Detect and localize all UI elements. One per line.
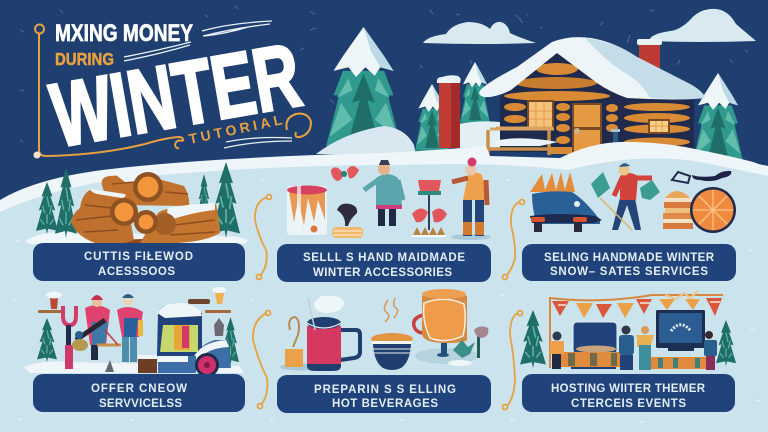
- left screen: [573, 322, 617, 354]
- right screen: [656, 310, 705, 351]
- white swooshes: [124, 21, 292, 148]
- tutorial label: TUTORIAL: [187, 111, 284, 147]
- connector: accessories to snow services: [502, 200, 524, 280]
- leaves: [591, 172, 660, 200]
- chimney: tall red: [437, 75, 461, 148]
- card: firewood: CUTTIS FIŁEWOD: [84, 251, 193, 263]
- card: handmade accessories: WINTER ACCESSORIES: [313, 267, 452, 279]
- trees: [36, 162, 240, 238]
- chimney: roof: [637, 39, 662, 76]
- tree: behind cabin: [460, 62, 490, 123]
- burger stack: [663, 191, 694, 229]
- card: winter events: [522, 374, 735, 412]
- person: red sweater: [600, 163, 652, 230]
- panel: hot beverages: [280, 289, 488, 371]
- stove pipe: [611, 129, 620, 149]
- card: handmade accessories: SELLL S HAND MAIDMADE: [303, 252, 465, 264]
- card: firewood: ACESSSOOS: [98, 266, 175, 278]
- tree: large left: [326, 27, 401, 147]
- tree: left of chimney: [415, 84, 449, 151]
- snowfield ground: [0, 142, 768, 432]
- left table: [560, 352, 623, 369]
- orange glass: [414, 289, 479, 364]
- during heading: DURING: [55, 49, 114, 69]
- card: snow services: SELING HANDMADE WINTER: [544, 252, 715, 264]
- snow base: [25, 232, 248, 244]
- tray with box and loop: [280, 317, 320, 370]
- bowl: [371, 333, 413, 370]
- visitors: [550, 326, 717, 370]
- cabin window: [527, 100, 554, 129]
- card: snow services: [522, 244, 736, 281]
- title frame line: [35, 24, 183, 156]
- panel: snow services people: [24, 287, 244, 377]
- cabin walls: [500, 52, 694, 152]
- cloud: right: [649, 9, 756, 42]
- right table: [651, 357, 706, 369]
- making money heading: MXING MONEY: [55, 20, 193, 47]
- card: snow services people: SERVVICELSS: [99, 398, 182, 410]
- small window: [648, 119, 670, 134]
- snow speckles in the sky: [20, 5, 748, 142]
- connector: offer to beverages: [253, 310, 270, 408]
- person: pink hat: [72, 295, 121, 372]
- winter heading: WINTER: [44, 26, 308, 167]
- panel: winter events: [520, 291, 736, 370]
- snowy roof: [479, 37, 705, 100]
- cabin logs: [504, 63, 690, 154]
- jar: [287, 185, 327, 235]
- card: hot beverages: PREPARIN S S ELLING: [314, 384, 456, 396]
- card: firewood: [33, 243, 245, 281]
- trees: [37, 317, 239, 365]
- card: hot beverages: [277, 375, 491, 413]
- plant: [448, 326, 488, 366]
- snow patch between chimney and cabin: [458, 121, 500, 150]
- vehicle: snow cab: [138, 303, 231, 377]
- snow base: [24, 362, 244, 373]
- snow mound: left of cabin: [316, 126, 416, 156]
- orange wheel: [672, 171, 736, 233]
- cloud: left: [423, 22, 536, 44]
- person: orange coat: [451, 158, 491, 240]
- center decoration: [412, 180, 447, 237]
- cabin door: [572, 103, 602, 156]
- connector: firewood to accessories: [255, 194, 272, 280]
- bunting: [552, 291, 722, 318]
- frame end dot: [34, 152, 40, 158]
- snow speckles on ground: [12, 180, 760, 422]
- shelf and glass right: [188, 287, 231, 336]
- tree: right of cabin: [693, 73, 743, 161]
- pancake stack: [332, 204, 363, 238]
- shelf and cup left: [38, 292, 65, 313]
- card: handmade accessories: [277, 244, 491, 282]
- logs: [71, 172, 220, 243]
- title block: [34, 20, 311, 167]
- person: teal coat: [364, 160, 403, 226]
- card: snow services people: OFFER CNEOW: [91, 383, 187, 395]
- pink flower: [331, 166, 359, 181]
- pink mug: [307, 296, 360, 371]
- tutorial curl: [286, 114, 311, 137]
- card: hot beverages: HOT BEVERAGES: [332, 398, 438, 410]
- card: snow services people: [33, 374, 245, 412]
- connector: beverages to events: [502, 310, 522, 410]
- bench: [486, 128, 558, 155]
- steam: [384, 298, 398, 322]
- cabin: [479, 37, 705, 156]
- panel: firewood: [25, 162, 248, 244]
- card: winter events: HOSTING WIITER THEMER: [551, 383, 706, 395]
- card: winter events: CTERCEIS EVENTS: [571, 398, 686, 410]
- vehicle: [530, 172, 602, 232]
- trees: [520, 310, 736, 368]
- booth frame: [550, 295, 723, 368]
- person: blue hat: [117, 294, 143, 362]
- pink U tool: [63, 306, 76, 369]
- panel: handmade accessories: [287, 158, 491, 240]
- panel: snow services: [530, 163, 736, 233]
- card: snow services: SNOW– SATES SERVICES: [550, 266, 708, 278]
